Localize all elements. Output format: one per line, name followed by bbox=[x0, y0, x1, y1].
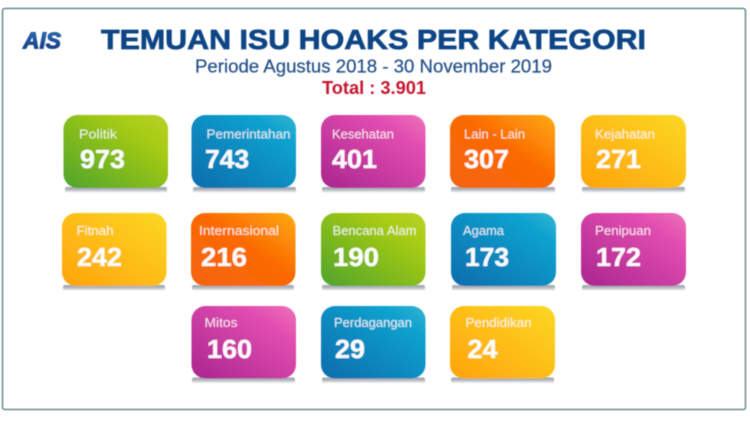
card: Agama bbox=[451, 213, 556, 291]
card: Fitnah: 242 bbox=[77, 242, 122, 272]
card: Politik bbox=[64, 115, 168, 193]
logo: AIS: AIS bbox=[22, 28, 62, 54]
card: Internasional bbox=[191, 213, 296, 291]
card: Fitnah: Fitnah bbox=[76, 224, 114, 238]
card: Bencana Alam: 190 bbox=[333, 242, 379, 272]
card: Bencana Alam: Bencana Alam bbox=[332, 224, 416, 238]
card: Pendidikan: Pendidikan bbox=[466, 316, 532, 330]
card: Politik: Politik bbox=[79, 128, 118, 142]
card: Kejahatan: 271 bbox=[596, 144, 641, 174]
card: Kejahatan: Kejahatan bbox=[595, 128, 655, 142]
card: Penipuan: 172 bbox=[596, 242, 641, 272]
card: Internasional: Internasional bbox=[199, 224, 279, 238]
card: Agama: Agama bbox=[463, 224, 504, 238]
card: Pemerintahan: Pemerintahan bbox=[206, 128, 291, 142]
card: Politik: 973 bbox=[80, 144, 125, 174]
card: Pemerintahan bbox=[192, 115, 296, 193]
card: Kesehatan: 401 bbox=[332, 144, 377, 174]
card: Perdagangan: 29 bbox=[335, 334, 365, 364]
card: Mitos bbox=[192, 306, 296, 384]
card: Penipuan bbox=[581, 213, 686, 291]
card: Perdagangan bbox=[321, 306, 426, 384]
title: TEMUAN ISU HOAKS PER KATEGORI bbox=[101, 24, 646, 55]
card: Perdagangan: Perdagangan bbox=[334, 316, 412, 330]
card grid bbox=[62, 115, 686, 384]
card: Kejahatan bbox=[581, 115, 686, 193]
card: Agama: 173 bbox=[465, 242, 509, 272]
card: Bencana Alam bbox=[321, 213, 426, 291]
card: Fitnah bbox=[62, 213, 166, 291]
card: Lain - Lain bbox=[450, 115, 555, 193]
card: Pendidikan bbox=[450, 306, 555, 384]
card: Lain - Lain: 307 bbox=[464, 144, 509, 174]
card: Internasional: 216 bbox=[201, 242, 247, 272]
card: Mitos: Mitos bbox=[204, 316, 238, 330]
card: Kesehatan bbox=[321, 115, 426, 193]
card: Lain - Lain: Lain - Lain bbox=[464, 128, 525, 142]
subtitle: period: Periode Agustus 2018 - 30 November 2019 bbox=[195, 56, 552, 76]
card: Kesehatan: Kesehatan bbox=[332, 128, 394, 142]
card: Penipuan: Penipuan bbox=[595, 224, 651, 238]
total: Total : 3.901 bbox=[322, 78, 426, 98]
card: Pemerintahan: 743 bbox=[205, 144, 249, 174]
card: Mitos: 160 bbox=[207, 334, 252, 364]
card: Pendidikan: 24 bbox=[468, 334, 498, 364]
